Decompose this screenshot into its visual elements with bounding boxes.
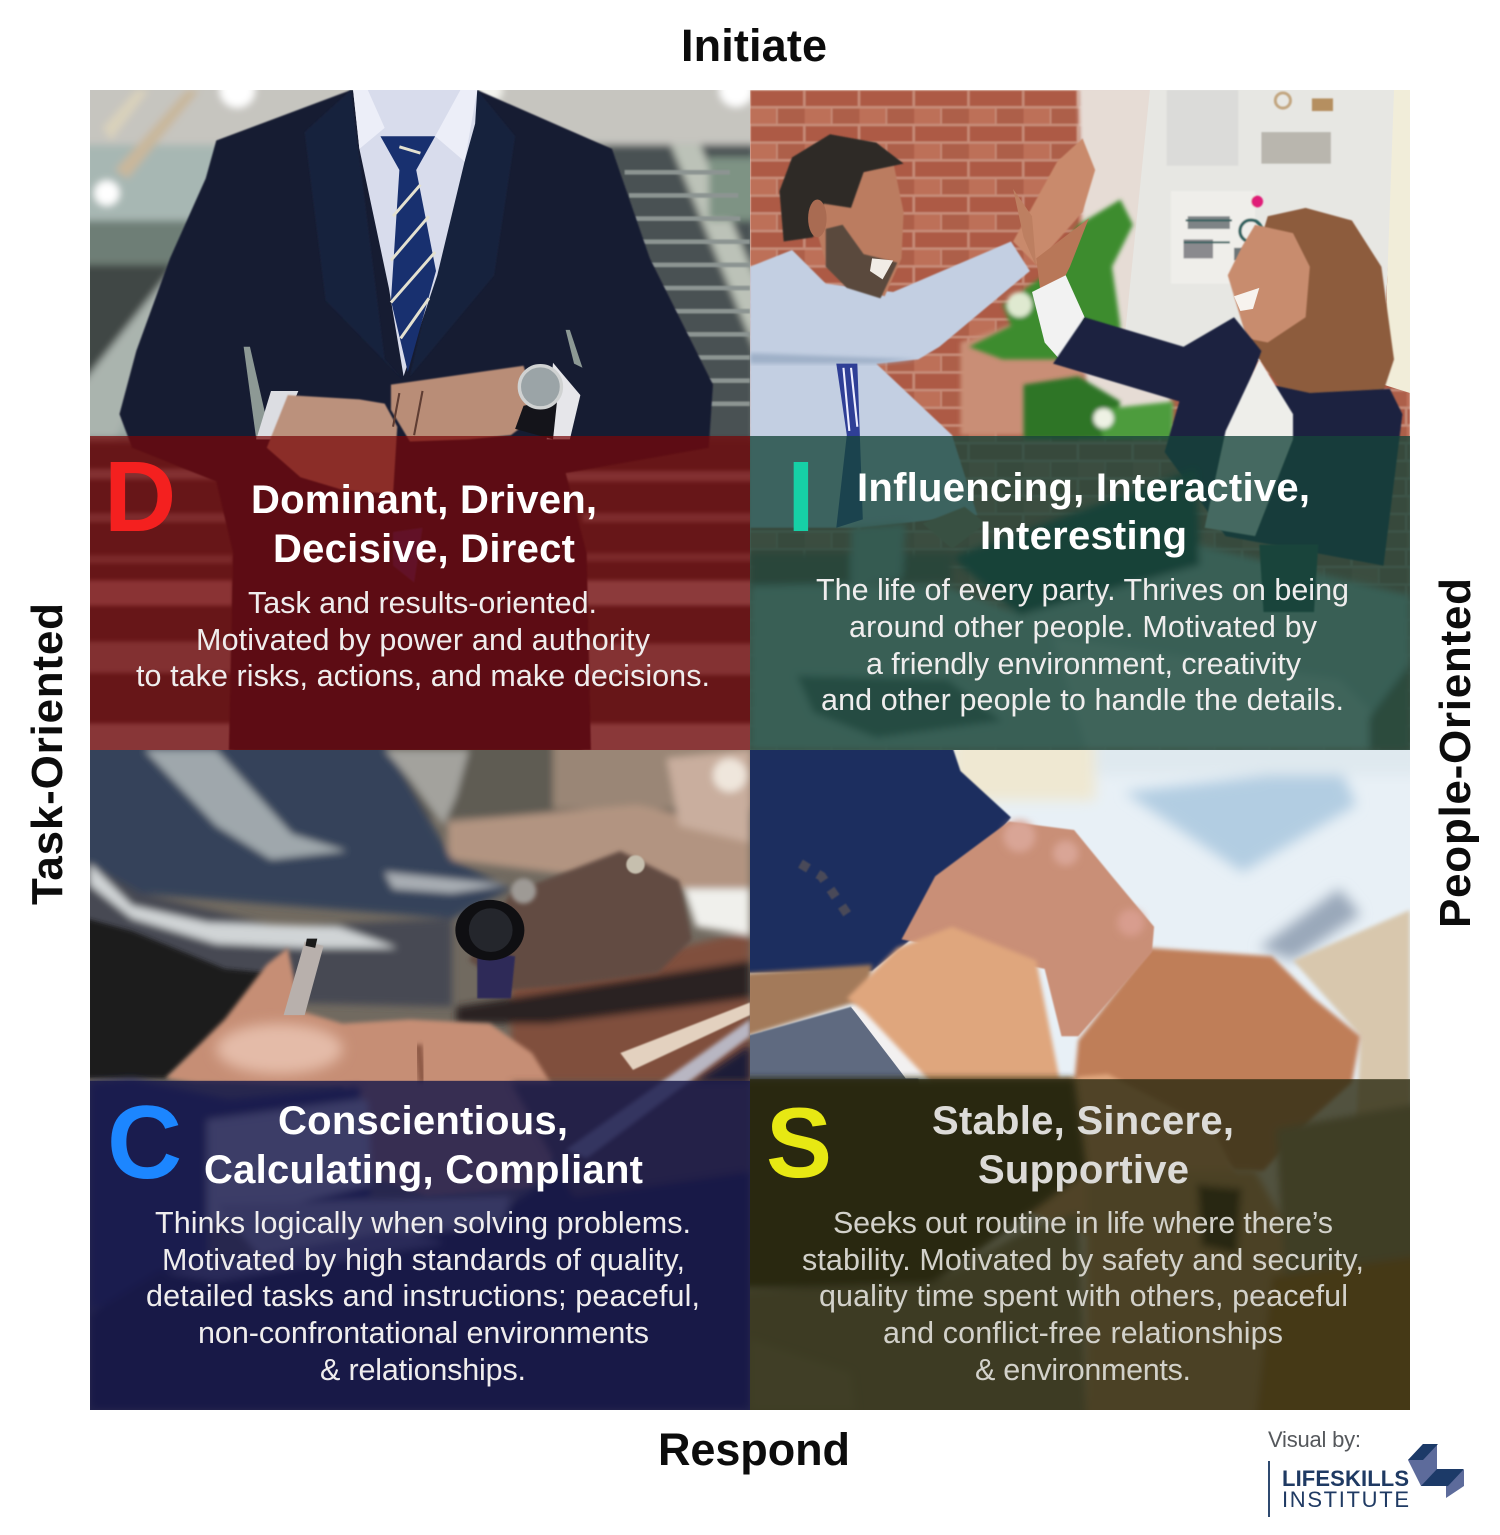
body text D: Task and results-oriented. (248, 586, 597, 620)
heading I (857, 466, 1310, 558)
body text D (136, 586, 710, 693)
body text I (816, 573, 1349, 717)
body text S: Seeks out routine in life where there’s (833, 1206, 1333, 1240)
overlay tint (90, 1081, 750, 1410)
panel: S stable (742, 737, 1423, 1419)
overlay tint (750, 1079, 1410, 1410)
body text I: around other people. Motivated by (849, 610, 1318, 644)
letter D: D (104, 441, 176, 553)
body text I: a friendly environment, creativity (866, 647, 1302, 681)
lower blurred (742, 1078, 1419, 1419)
title: Initiate axis label: Initiate (681, 20, 827, 71)
body text S: quality time spent with others, peaceful (819, 1279, 1348, 1313)
right hand (1074, 948, 1360, 1171)
heading D: Decisive, Direct (273, 527, 575, 571)
body text C: Motivated by high standards of quality, (162, 1243, 685, 1277)
logo icon (1408, 1444, 1464, 1498)
body text C: & relationships. (320, 1353, 526, 1387)
left hand (846, 926, 1232, 1234)
panel: C conscientious (82, 742, 763, 1410)
logo wordmark (1282, 1466, 1409, 1512)
photo: colleagues high-five (750, 86, 1410, 750)
heading C (204, 1099, 643, 1192)
body text C (146, 1206, 700, 1387)
body text I: and other people to handle the details. (821, 683, 1344, 717)
heading S (932, 1099, 1234, 1192)
credit text: Visual by: (1268, 1427, 1361, 1452)
heading C: Calculating, Compliant (204, 1148, 643, 1192)
man (750, 242, 1030, 528)
top hand (902, 822, 1154, 1036)
panel: I influencing (750, 86, 1410, 750)
table objects under overlay (750, 469, 1410, 750)
beige sleeve (1293, 910, 1410, 1129)
heading S: Stable, Sincere, (932, 1099, 1234, 1143)
logo wordmark: LIFESKILLS (1282, 1466, 1409, 1491)
lower blurred stair bands (82, 469, 755, 757)
photo: hands writing at meeting table (82, 742, 763, 1410)
heading C: Conscientious, (278, 1099, 568, 1143)
photo: businessman in dark suit (82, 72, 759, 759)
photo: stacked hands holding wrists (742, 737, 1423, 1419)
heading D (251, 478, 597, 571)
heading D: Dominant, Driven, (251, 478, 597, 522)
writing hand (166, 948, 561, 1196)
axis label: People-Oriented: People-Oriented (1431, 578, 1480, 928)
axis label: Task-Oriented: Task-Oriented (23, 603, 72, 905)
body text S (802, 1206, 1364, 1387)
letter I: I (787, 441, 815, 553)
body text S: and conflict-free relationships (883, 1316, 1283, 1350)
letter S: S (766, 1087, 832, 1198)
body text I: The life of every party. Thrives on being (816, 573, 1349, 607)
body text D: to take risks, actions, and make decisions. (136, 659, 710, 693)
panel: D dominant (82, 72, 759, 759)
body text S: & environments. (975, 1353, 1191, 1387)
body text C: Thinks logically when solving problems. (155, 1206, 691, 1240)
credit: Visual by Lifeskills Institute (1268, 1427, 1464, 1517)
logo bar (1268, 1461, 1270, 1517)
heading S: Supportive (978, 1148, 1189, 1192)
body text S: stability. Motivated by safety and security, (802, 1243, 1364, 1277)
letter C: C (107, 1085, 182, 1201)
body text C: non-confrontational environments (198, 1316, 649, 1350)
lower region (90, 1045, 750, 1410)
logo wordmark: INSTITUTE (1282, 1487, 1409, 1512)
axis label: Respond: Respond (658, 1424, 850, 1475)
heading I: Influencing, Interactive, (857, 466, 1310, 510)
woman (1036, 218, 1089, 292)
body text C: detailed tasks and instructions; peaceful, (146, 1279, 700, 1313)
overlay tint (750, 436, 1410, 750)
body text D: Motivated by power and authority (196, 623, 651, 657)
overlay tint (90, 436, 750, 750)
heading I: Interesting (980, 514, 1187, 558)
